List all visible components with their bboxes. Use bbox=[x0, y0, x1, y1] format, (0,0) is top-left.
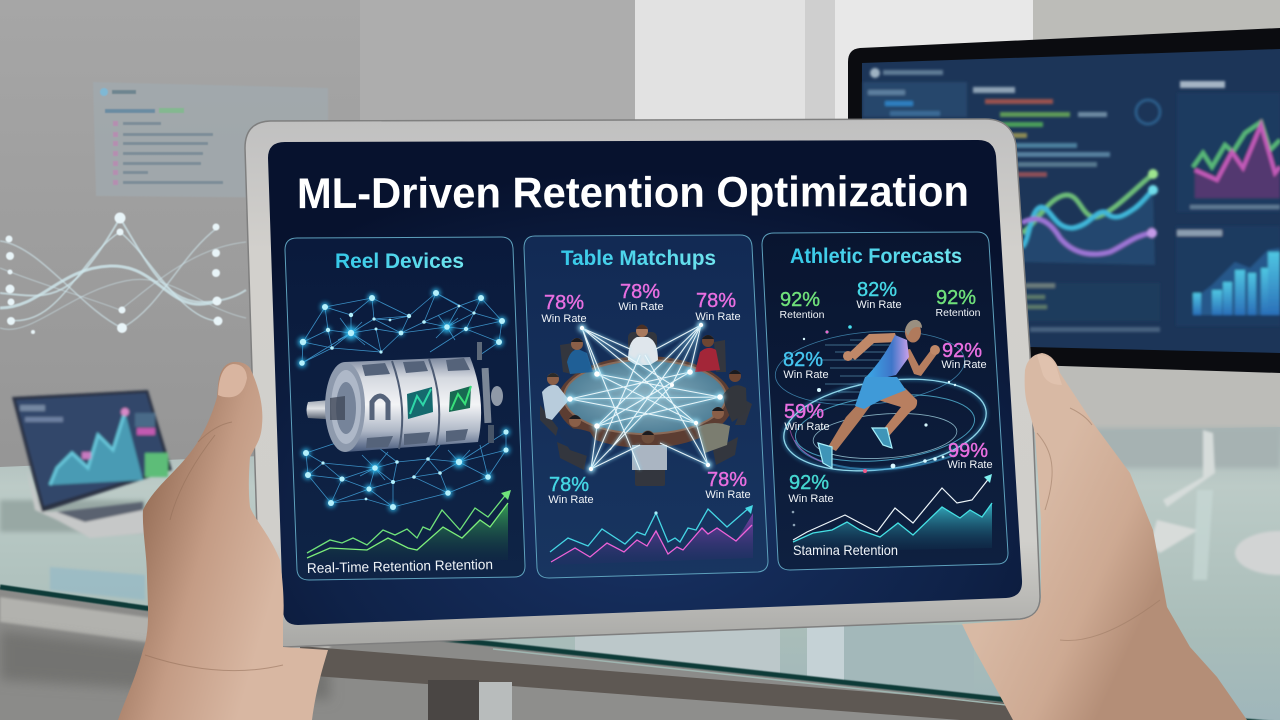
reel chart symbol 2 bbox=[449, 386, 471, 412]
stamina caption: Stamina Retention bbox=[793, 542, 898, 558]
reel arch symbol bbox=[372, 396, 388, 420]
reel windows bbox=[362, 358, 470, 448]
front leg bbox=[878, 388, 917, 436]
title: ML-Driven Retention Optimization bbox=[297, 168, 969, 218]
stat: upper left: 78% bbox=[544, 292, 584, 314]
shoes bbox=[818, 443, 832, 468]
panel 2 card bbox=[524, 235, 768, 578]
stamina line chart bbox=[792, 474, 992, 552]
stat: upper left bbox=[541, 292, 587, 325]
floor and desk frame bbox=[0, 587, 1280, 720]
orbit sparks bbox=[803, 325, 956, 473]
link star network bbox=[566, 321, 724, 473]
wave nodes bbox=[6, 212, 222, 334]
background neural waves bbox=[0, 218, 246, 329]
right thumbnail bbox=[1037, 355, 1062, 385]
back leg bbox=[828, 398, 876, 451]
runner athlete bbox=[818, 320, 940, 468]
panel: reel devices bbox=[285, 237, 525, 580]
near arm bbox=[848, 333, 898, 360]
player bottom bbox=[632, 430, 667, 470]
stat: lower right bbox=[705, 469, 751, 501]
player upper right bbox=[695, 335, 720, 372]
stat: retention right: Retention bbox=[936, 307, 981, 319]
stat: bottom teal: 92% bbox=[789, 472, 829, 494]
stat: mid left blue: Win Rate bbox=[783, 369, 829, 381]
stat: top: 78% bbox=[620, 281, 660, 303]
keyboard bbox=[1150, 520, 1198, 553]
desk accessories bbox=[1150, 490, 1280, 580]
reel lever bbox=[477, 342, 503, 443]
glass desk bbox=[0, 427, 1280, 720]
stat: top: Win Rate bbox=[618, 301, 664, 313]
stat: lower right: 78% bbox=[707, 469, 747, 491]
player right bbox=[723, 370, 747, 422]
stat: top bbox=[856, 279, 902, 311]
stat: top: 82% bbox=[857, 279, 897, 301]
background holographic panel bbox=[93, 82, 328, 198]
speed orbit rings bbox=[772, 324, 992, 483]
stat: lower left: 78% bbox=[549, 474, 589, 496]
panel 2 heading: Table Matchups bbox=[561, 247, 716, 270]
round table bbox=[557, 356, 733, 448]
left thumbnail bbox=[218, 364, 247, 397]
chairs bbox=[540, 332, 752, 486]
panel 3 heading: Athletic Forecasts bbox=[790, 245, 962, 268]
win rate line chart bbox=[550, 505, 753, 565]
stat: retention left bbox=[780, 289, 825, 321]
stat: top bbox=[618, 281, 664, 313]
reel axle bbox=[306, 399, 340, 420]
left hand shape bbox=[118, 362, 328, 720]
reel end cap bbox=[325, 362, 365, 452]
laptop base bbox=[27, 470, 150, 538]
stat: retention left: 92% bbox=[780, 289, 820, 311]
player top bbox=[628, 324, 658, 365]
reel chart symbol 1 bbox=[407, 387, 433, 419]
monitor dashboard content bbox=[863, 68, 1280, 332]
stat: mid left blue bbox=[783, 349, 829, 381]
stat: mid left blue: 82% bbox=[783, 349, 823, 371]
player lower right bbox=[697, 407, 730, 453]
right hand creases bbox=[1037, 408, 1160, 640]
icon: reel drum bbox=[306, 342, 503, 452]
tablet frame bbox=[245, 119, 1040, 647]
stat: mid right pink bbox=[941, 340, 987, 371]
stat: bottom teal: Win Rate bbox=[788, 493, 834, 505]
shorts bbox=[855, 377, 906, 409]
player left bbox=[542, 373, 569, 420]
stat: bottom teal bbox=[788, 472, 834, 505]
panel: table matchups bbox=[524, 235, 768, 578]
stat: lower left pink bbox=[784, 401, 830, 433]
players bbox=[542, 324, 747, 470]
stat: upper right: 78% bbox=[696, 290, 736, 312]
stat: lower right: Win Rate bbox=[705, 489, 751, 501]
stat: lower left bbox=[548, 474, 594, 506]
background laptop bbox=[12, 390, 172, 600]
laptop screen bbox=[12, 390, 172, 512]
stat: lower right pink: 99% bbox=[948, 440, 988, 462]
left hand bbox=[118, 362, 328, 720]
background monitor dashboard bbox=[848, 28, 1280, 507]
stat: retention left: Retention bbox=[780, 309, 825, 321]
retention line chart bbox=[307, 490, 511, 562]
network graph top bbox=[298, 288, 506, 368]
reel cylinder bbox=[335, 357, 481, 452]
stat: upper right: Win Rate bbox=[695, 311, 741, 323]
torso singlet bbox=[866, 335, 909, 380]
tablet bbox=[245, 119, 1040, 647]
right hand shape bbox=[962, 353, 1247, 720]
stat: upper right bbox=[695, 290, 741, 323]
network graph bottom bbox=[302, 428, 510, 512]
monitor stand bbox=[1163, 430, 1215, 507]
head bbox=[905, 320, 922, 342]
stat: top: Win Rate bbox=[856, 299, 902, 311]
panel: athletic forecasts bbox=[762, 232, 1008, 570]
reel dividers bbox=[392, 359, 439, 449]
stat: lower left pink: 59% bbox=[784, 401, 824, 423]
stat: mid right pink: 92% bbox=[942, 340, 982, 362]
player lower left bbox=[558, 415, 595, 457]
monitor frame bbox=[848, 28, 1280, 373]
stat: lower left pink: Win Rate bbox=[784, 421, 830, 433]
stat: retention right: 92% bbox=[936, 287, 976, 309]
tablet screen bbox=[268, 140, 1022, 625]
panel 1 card bbox=[285, 237, 525, 580]
far arm bbox=[904, 349, 937, 376]
stat: lower left: Win Rate bbox=[548, 494, 594, 506]
retention caption: Real-Time Retention Retention bbox=[307, 556, 493, 576]
stand reflection bbox=[1193, 490, 1213, 580]
player upper left bbox=[567, 338, 593, 374]
stat: retention right bbox=[936, 287, 981, 319]
monitor screen bbox=[862, 49, 1280, 353]
laptop reflection bbox=[50, 567, 145, 600]
stat: lower right pink: Win Rate bbox=[947, 459, 993, 471]
panel 1 heading: Reel Devices bbox=[335, 250, 464, 273]
right hand bbox=[962, 353, 1247, 720]
speed lines bbox=[820, 340, 895, 400]
stat: upper left: Win Rate bbox=[541, 313, 587, 325]
stat: mid right pink: Win Rate bbox=[941, 359, 987, 371]
panel 3 card bbox=[762, 232, 1008, 570]
left hand creases bbox=[145, 422, 283, 671]
stat: lower right pink bbox=[947, 440, 993, 471]
fists bbox=[843, 345, 940, 361]
mouse bbox=[1235, 531, 1280, 575]
